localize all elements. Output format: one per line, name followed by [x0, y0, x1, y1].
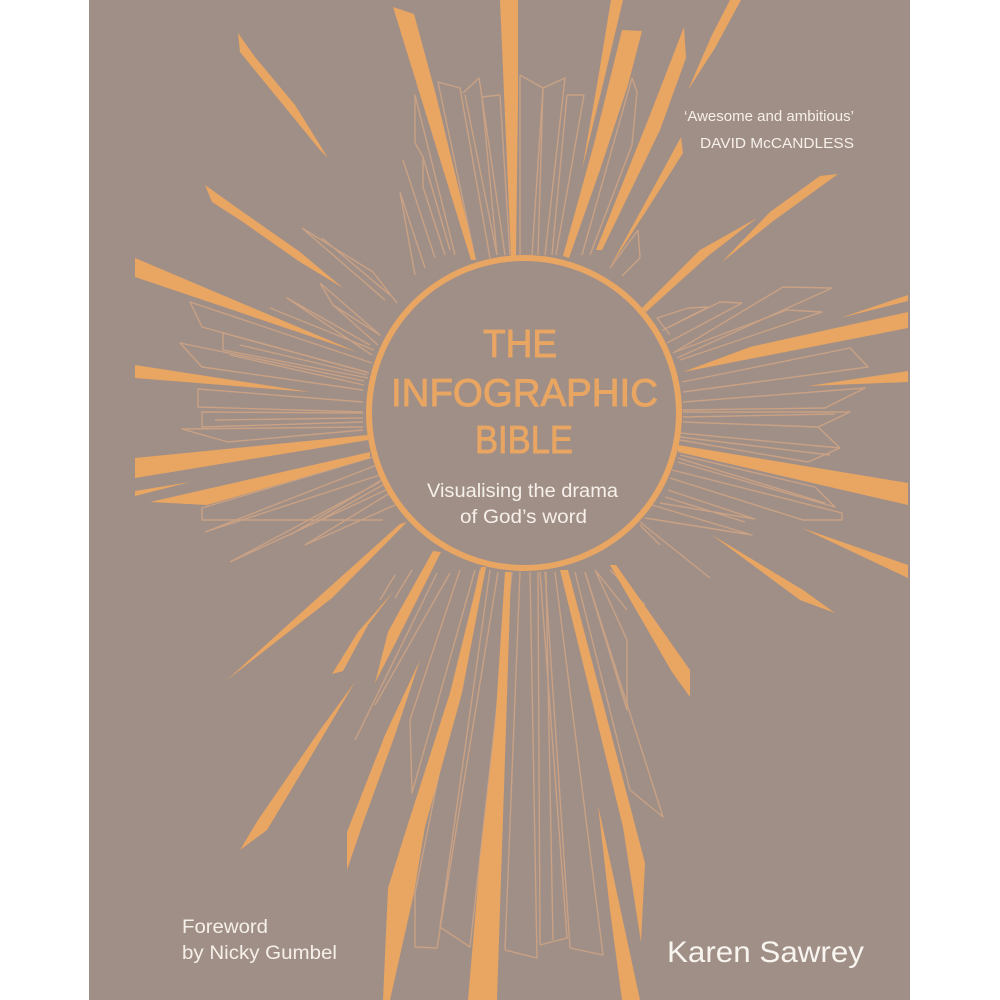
thin outline rays: book pages	[180, 75, 868, 958]
rays: top	[393, 0, 741, 267]
endorsement quote	[684, 109, 854, 152]
bottom page outlines	[355, 570, 663, 958]
subtitle	[427, 481, 618, 528]
title: INFOGRAPHIC	[391, 372, 658, 415]
rays: bottom	[347, 551, 690, 1000]
foreword credit	[182, 917, 337, 964]
right page outlines	[640, 287, 868, 578]
title: THE	[483, 323, 557, 366]
central circle	[369, 258, 679, 568]
left page outlines	[180, 228, 397, 562]
rays: left	[135, 33, 407, 850]
subtitle: Visualising the drama	[427, 481, 618, 502]
endorsement quote: DAVID McCANDLESS	[700, 136, 854, 152]
endorsement quote: ‘Awesome and ambitious’	[684, 109, 854, 125]
top page outlines	[400, 75, 640, 276]
title: BIBLE	[475, 419, 573, 462]
foreword credit: Foreword	[182, 917, 268, 938]
author name: Karen Sawrey	[667, 936, 864, 969]
subtitle: of God’s word	[460, 507, 587, 528]
foreword credit: by Nicky Gumbel	[182, 943, 337, 964]
solid orange rays	[135, 0, 908, 1000]
title	[391, 323, 658, 462]
rays: right	[642, 174, 908, 613]
